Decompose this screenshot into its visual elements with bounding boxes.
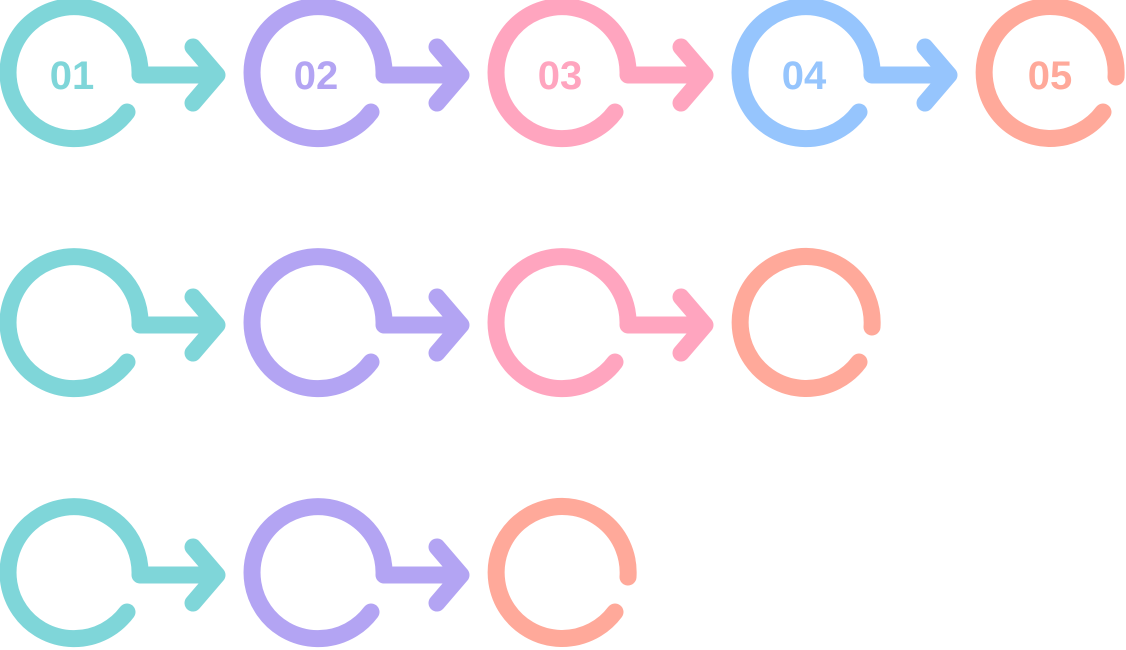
circle pink with arrow bbox=[496, 257, 705, 389]
row 2: four steps bbox=[8, 256, 872, 389]
step 03 circle with arrow: 03 bbox=[538, 54, 582, 98]
circle teal with arrow bbox=[8, 257, 217, 389]
circle purple with arrow bbox=[252, 257, 461, 389]
circle salmon bbox=[740, 256, 872, 388]
row 3: three steps bbox=[8, 506, 628, 639]
step 04 circle with arrow bbox=[740, 7, 949, 139]
row 1: numbered steps bbox=[8, 6, 1116, 139]
step 04 circle with arrow: 04 bbox=[782, 54, 827, 98]
step 02 circle with arrow: 02 bbox=[294, 54, 338, 98]
step 03 circle with arrow bbox=[496, 7, 705, 139]
circle salmon bbox=[496, 506, 628, 638]
step 01 circle with arrow: 01 bbox=[50, 54, 94, 98]
circle teal with arrow bbox=[8, 507, 217, 639]
step 01 circle with arrow bbox=[8, 7, 217, 139]
step 05 circle bbox=[984, 6, 1116, 138]
step 05 circle: 05 bbox=[1028, 54, 1072, 98]
circle purple with arrow bbox=[252, 507, 461, 639]
step 02 circle with arrow bbox=[252, 7, 461, 139]
